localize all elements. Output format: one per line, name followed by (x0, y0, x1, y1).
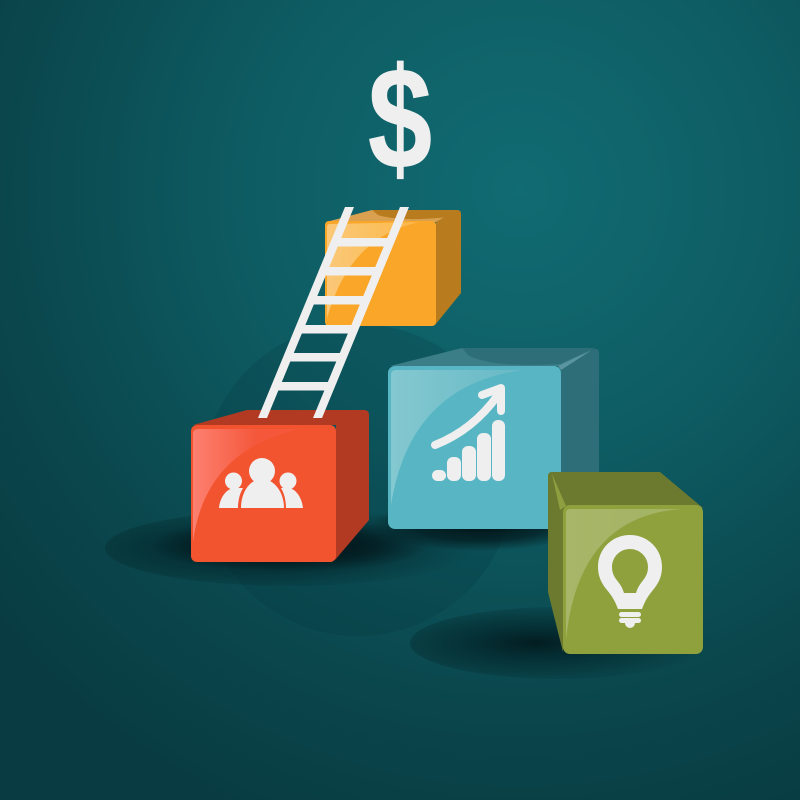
background circle (202, 324, 514, 636)
icon: group of people (219, 458, 303, 508)
green cube (548, 472, 703, 654)
red cube top face (193, 410, 366, 425)
green cube top face (552, 472, 703, 508)
icon: rising bar chart with arrow (432, 388, 505, 481)
red cube (191, 410, 369, 562)
dollar sign: $ (368, 38, 432, 199)
teal cube corner highlight (558, 350, 592, 370)
teal cube gloss (391, 370, 524, 505)
teal cube front face (388, 366, 561, 529)
teal cube (388, 348, 599, 529)
shadows under cubes (105, 499, 710, 679)
icon: light bulb (598, 535, 662, 628)
teal cube top face (390, 348, 595, 366)
green cube front face (563, 505, 703, 654)
green cube gloss (566, 509, 682, 640)
green cube side face (548, 472, 566, 652)
red cube gloss (193, 429, 300, 542)
orange cube side face (435, 210, 461, 325)
orange cube top face (326, 210, 458, 222)
orange cube front face (325, 221, 436, 326)
orange cube gloss (327, 222, 420, 318)
teal cube side face (561, 349, 599, 528)
orange cube (325, 210, 461, 326)
red cube side face (335, 410, 369, 560)
ladder (258, 207, 409, 418)
red cube front face (191, 425, 336, 562)
